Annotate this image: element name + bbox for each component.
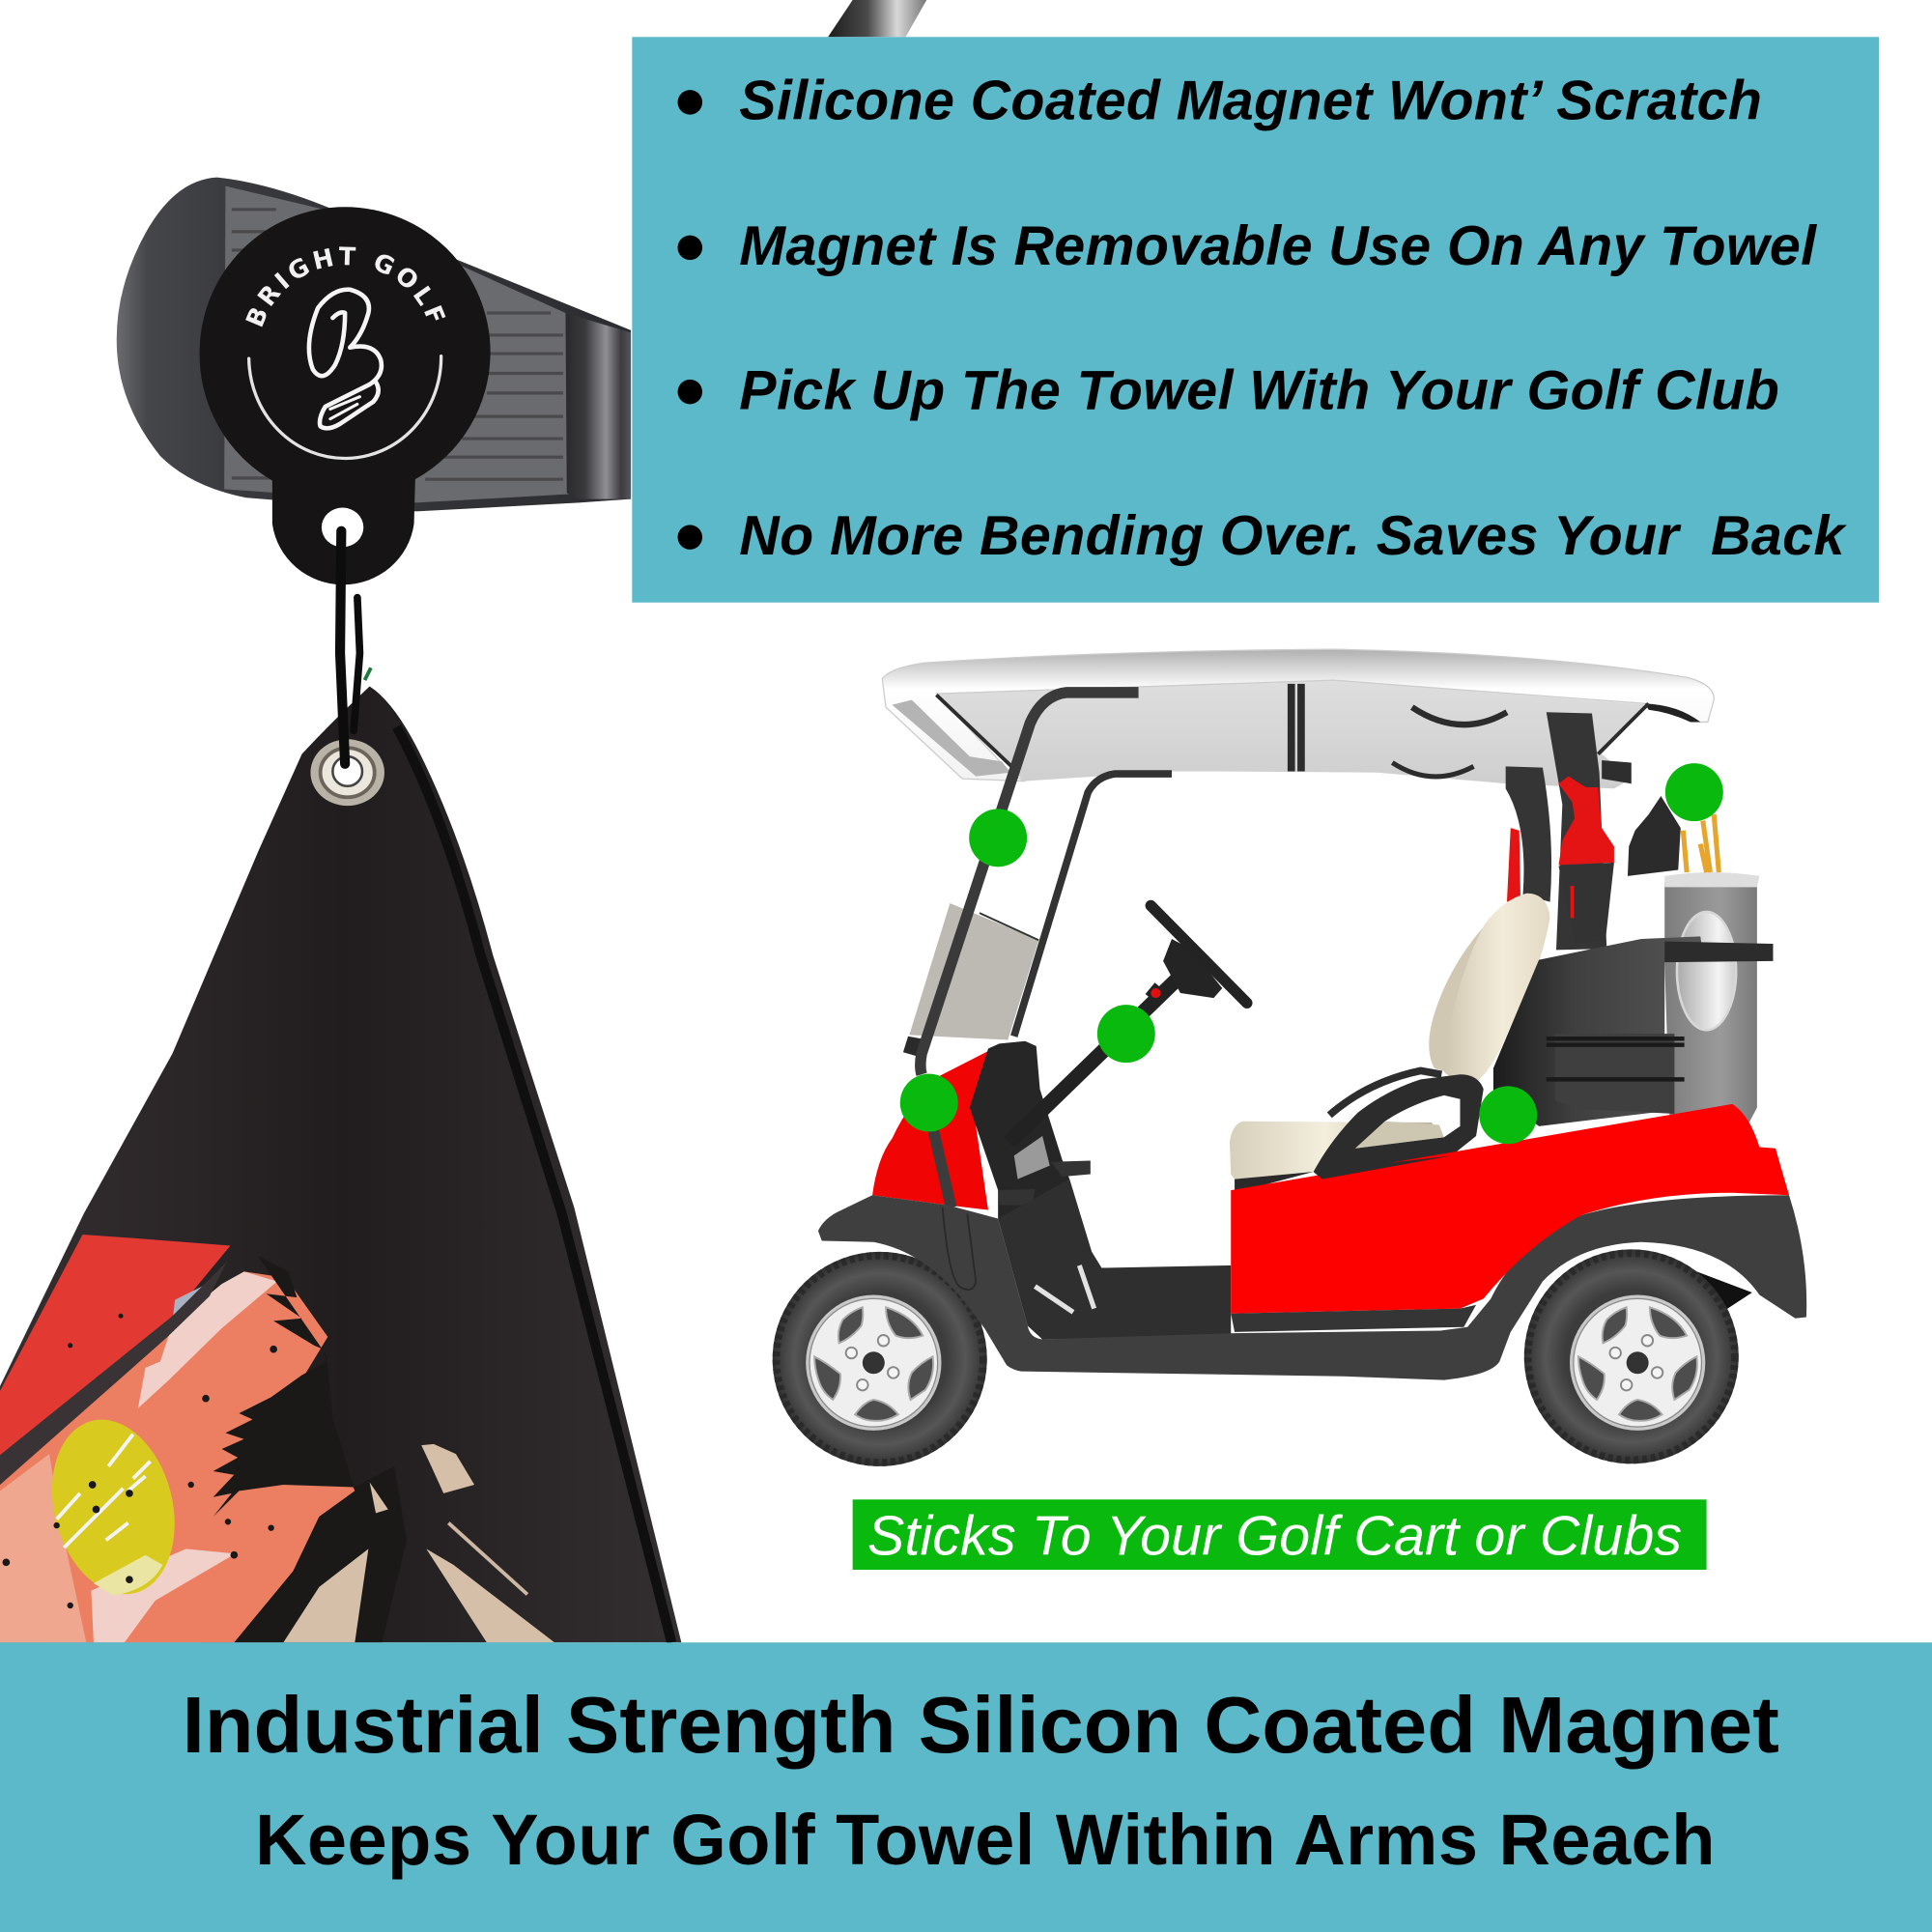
- steering wheel: [1151, 906, 1247, 1003]
- roof rear bar: [1602, 760, 1632, 783]
- dash tower: [970, 1041, 1101, 1267]
- sill: [1231, 1305, 1476, 1332]
- bullet 4: No More Bending Over. Saves Your Back: [739, 505, 1848, 567]
- magnet disc: BRIGHT GOLF: [245, 246, 446, 327]
- front body panel seam: [943, 1208, 976, 1290]
- seat cushion: [1230, 1122, 1440, 1179]
- control panel: [1014, 1136, 1050, 1179]
- cushion underside: [1235, 1172, 1314, 1193]
- towel blue grey fleck: [173, 1282, 212, 1321]
- storage box: [1555, 1034, 1674, 1114]
- green caption: Sticks To Your Golf Cart or Clubs: [867, 1506, 1682, 1568]
- towel dark stripe: [0, 1262, 227, 1485]
- storage box rails: [1547, 1038, 1685, 1079]
- towel light salmon area: [0, 1454, 86, 1642]
- golf cart illustration: [773, 649, 1806, 1466]
- steering hub: [1163, 939, 1222, 998]
- disc body: [200, 207, 491, 584]
- bottle red slit: [1571, 886, 1574, 918]
- towel right hem: [397, 727, 671, 1642]
- chassis and fenders: [818, 1195, 1806, 1380]
- golf club heads: [1628, 796, 1681, 876]
- red side body: [1231, 1104, 1789, 1314]
- windshield glass: [909, 903, 1038, 1040]
- towel pink lower brush stroke: [91, 1548, 236, 1642]
- rear under-frame: [1663, 1265, 1752, 1314]
- towel speckles: [3, 1314, 277, 1608]
- magnet disc: [199, 207, 491, 585]
- bullet 2: Magnet Is Removable Use On Any Towel: [739, 215, 1817, 277]
- towel pink upper brush stroke: [138, 1271, 277, 1408]
- towel: [0, 668, 681, 1642]
- golf bag rim: [1664, 872, 1759, 887]
- windshield top edge: [980, 913, 1038, 940]
- roof rim inner shadow: [892, 699, 1010, 777]
- bag strap: [1664, 941, 1773, 962]
- towel pale sun reflection: [94, 1555, 162, 1596]
- towel body: [0, 686, 681, 1642]
- golf club iron head: [117, 178, 631, 511]
- roof struts and handles: [936, 684, 1649, 777]
- towel grommet: [310, 739, 384, 806]
- seat back front layer: [1444, 894, 1550, 1082]
- towel orange brush stroke: [0, 1271, 355, 1642]
- bullet 1: Silicone Coated Magnet Wont’ Scratch: [739, 71, 1762, 132]
- golf bag: [1664, 882, 1757, 1126]
- steering column: [1009, 979, 1178, 1142]
- black bottle: [1559, 863, 1614, 944]
- front lower post: [933, 1127, 952, 1208]
- pedals: [1035, 1265, 1094, 1312]
- golf bag pocket: [1677, 912, 1736, 1030]
- roof underside: [936, 680, 1649, 788]
- armrest opening cushion: [1355, 1122, 1444, 1149]
- magnet spot markers: [900, 763, 1723, 1144]
- towel thin palm streak: [448, 1523, 527, 1595]
- floor: [998, 1179, 1231, 1339]
- roof right tail: [1645, 703, 1700, 722]
- windshield bracket: [903, 1037, 927, 1057]
- front wheel: [773, 1252, 987, 1466]
- B monogram: [309, 290, 382, 428]
- headline line 2: Keeps Your Golf Towel Within Arms Reach: [255, 1800, 1716, 1880]
- towel sun white streaks: [57, 1435, 151, 1548]
- front windshield posts: [921, 693, 1139, 1074]
- bullet 3: Pick Up The Towel With Your Golf Club: [739, 359, 1779, 421]
- seat back rear layer: [1429, 914, 1495, 1078]
- towel beige palm strokes: [283, 1444, 554, 1642]
- headline line 1: Industrial Strength Silicon Coated Magnet: [183, 1680, 1779, 1770]
- cup holders: [998, 1161, 1091, 1205]
- towel red patch: [0, 1235, 231, 1455]
- armrest front overlap: [1314, 1155, 1452, 1179]
- rear arm behind: [1329, 1070, 1441, 1115]
- front red body: [872, 1051, 988, 1210]
- rear wheel: [1524, 1249, 1739, 1463]
- smile arc: [249, 356, 441, 458]
- towel yellow sun: [35, 1406, 192, 1607]
- armrest: [1314, 1074, 1484, 1179]
- cabinet behind seat: [1493, 936, 1704, 1126]
- roof white rim: [882, 649, 1714, 781]
- towel palm fronds: [213, 1256, 407, 1642]
- red accessory: [1507, 777, 1614, 902]
- rear posts: [1506, 712, 1606, 950]
- steering red button: [1146, 982, 1166, 1004]
- carabiner clip: [340, 531, 359, 764]
- panel: bottom headline: [0, 1642, 1932, 1932]
- panel: feature bullet list: [632, 37, 1879, 603]
- brand text on arc: [259, 265, 434, 353]
- golf club shaft: [828, 0, 926, 37]
- magnet hole: [322, 508, 363, 547]
- towel green thread: [365, 668, 371, 680]
- golf club shafts: [1683, 814, 1719, 872]
